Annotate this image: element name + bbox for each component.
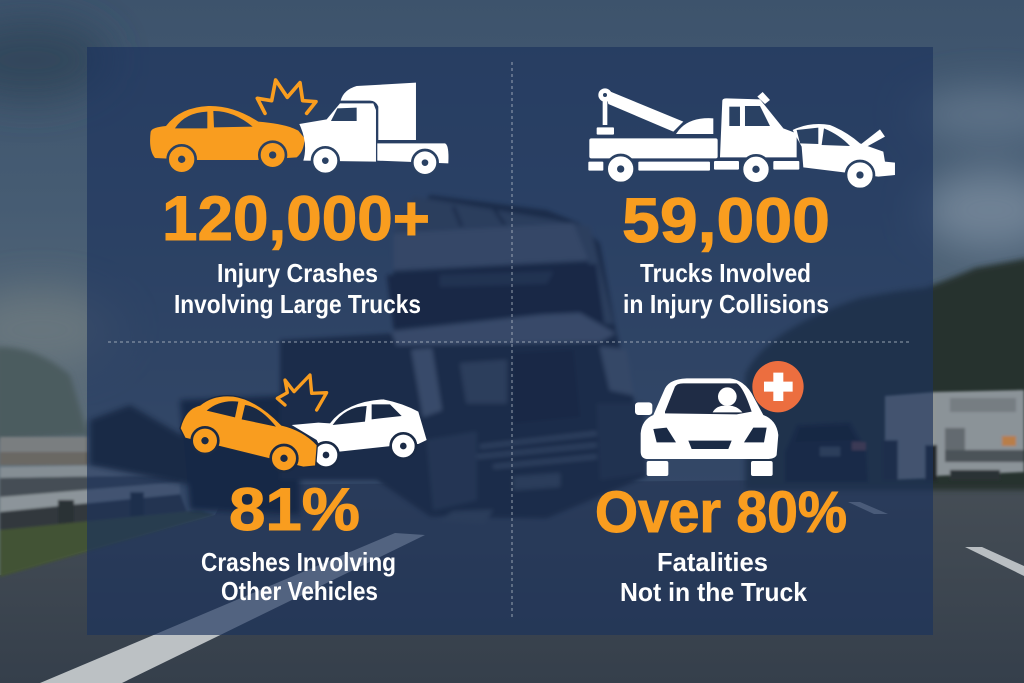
panel: injury crashes <box>150 80 448 319</box>
panel: trucks involved <box>588 88 895 319</box>
label: crashes involving other vehicles: Other Vehicles <box>221 576 378 606</box>
road surface <box>0 478 1024 683</box>
icon: two cars colliding <box>180 375 427 472</box>
panel: translucent navy overlay <box>87 47 933 635</box>
icon: orange car hitting white truck <box>150 80 448 175</box>
label: trucks involved: in Injury Collisions <box>623 289 829 319</box>
label: fatalities not in the truck: Fatalities <box>657 547 768 577</box>
label: injury crashes: Involving Large Trucks <box>174 289 421 319</box>
guard rails and verge <box>0 437 215 577</box>
label: fatalities not in the truck: Not in the Truck <box>620 577 808 607</box>
number: over 80%: Over 80% <box>595 480 847 545</box>
label: fatalities not in the truck <box>620 547 808 607</box>
label: injury crashes <box>174 258 421 319</box>
panel: fatalities <box>595 361 847 607</box>
number: 120,000+: 120,000+ <box>162 184 430 254</box>
wrecked truck <box>280 195 647 523</box>
panel: crashes with other vehicles <box>180 375 427 606</box>
label: crashes involving other vehicles: Crashes Involving <box>201 547 396 577</box>
quadrant dividers <box>108 62 912 620</box>
number: 81%: 81% <box>229 476 360 543</box>
label: trucks involved: Trucks Involved <box>640 258 811 288</box>
label: trucks involved <box>623 258 829 319</box>
lane markings <box>40 533 425 683</box>
icon: medical cross badge <box>752 361 804 412</box>
label: injury crashes: Injury Crashes <box>217 258 378 288</box>
icon: tow truck with damaged car <box>588 88 895 189</box>
number: 59,000: 59,000 <box>622 186 830 256</box>
icon: front view car with occupant <box>635 361 804 476</box>
tree lines <box>0 258 1024 490</box>
distant truck and car <box>785 390 1024 482</box>
label: crashes involving other vehicles <box>201 547 396 606</box>
